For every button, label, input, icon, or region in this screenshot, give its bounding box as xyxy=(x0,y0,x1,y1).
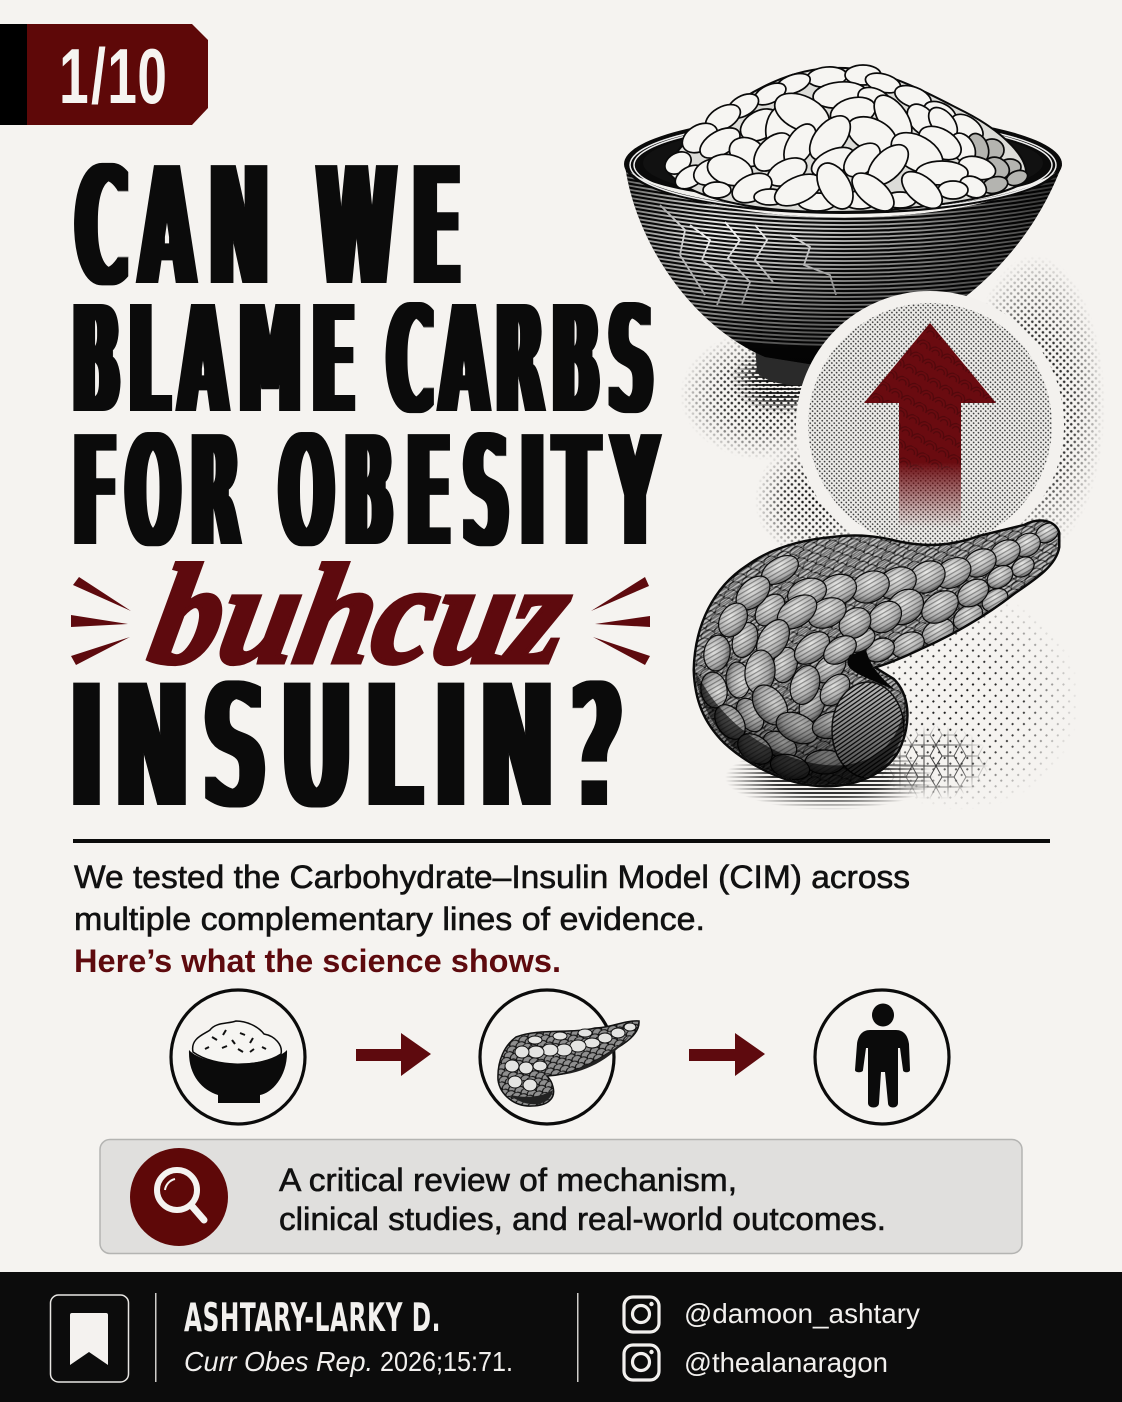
burst marks left xyxy=(71,577,131,665)
highlighted sentence: Here’s what the science shows. xyxy=(74,943,561,979)
callout text xyxy=(279,1162,886,1237)
icon: bookmark xyxy=(50,1295,128,1382)
circle xyxy=(796,291,1064,559)
social handle 2: @thealanaragon xyxy=(684,1347,888,1378)
script word: buhcuz xyxy=(140,536,583,694)
arrow 2 xyxy=(689,1033,765,1076)
callout text: clinical studies, and real-world outcomes. xyxy=(279,1201,886,1237)
intro text block: multiple complementary lines of evidence. xyxy=(74,901,705,937)
citation: ASHTARY-LARKY D. xyxy=(184,1296,441,1341)
intro text block xyxy=(74,859,910,979)
title accent: buhcuz with burst marks xyxy=(71,536,650,694)
divider rule xyxy=(73,839,1050,843)
bowl foot xyxy=(755,345,835,385)
bowl rim xyxy=(624,114,1062,214)
rice pile xyxy=(661,65,1030,218)
badge: slide counter 1/10: 1/10 xyxy=(59,34,167,121)
title: main headline: BLAME CARBS xyxy=(73,270,653,451)
citation xyxy=(184,1296,513,1377)
icon: pancreas in circle xyxy=(480,990,639,1124)
halftone shadows behind illustration xyxy=(680,255,1105,810)
icon: magnifying glass xyxy=(130,1148,228,1246)
intro text block: We tested the Carbohydrate–Insulin Model (CIM) across xyxy=(74,859,910,895)
illustration: pancreas xyxy=(690,515,1065,790)
badge: slide counter 1/10 xyxy=(0,24,208,125)
social handle 2 xyxy=(624,1345,888,1380)
upward arrow xyxy=(864,323,996,530)
icon: rice bowl in circle xyxy=(171,990,305,1124)
arrow 1 xyxy=(356,1033,431,1076)
citation: 2026;15:71. xyxy=(380,1346,513,1377)
burst marks right xyxy=(591,577,650,665)
title: main headline: CAN WE xyxy=(75,128,461,326)
bowl body xyxy=(626,165,1062,364)
panel: critical review callout xyxy=(100,1140,1022,1254)
title: main headline: INSULIN? xyxy=(70,645,623,850)
citation: Curr Obes Rep. xyxy=(184,1346,373,1377)
footer bar xyxy=(0,1272,1122,1402)
title: main headline: FOR OBESITY xyxy=(73,400,659,585)
illustration: bowl of rice xyxy=(624,64,1062,386)
flow diagram: rice to pancreas to person xyxy=(171,990,949,1124)
illustration: arrow in circle xyxy=(796,291,1064,559)
social handle 1: @damoon_ashtary xyxy=(684,1298,920,1329)
title: main headline xyxy=(70,128,659,850)
icon: person in circle xyxy=(815,990,949,1124)
callout text: A critical review of mechanism, xyxy=(279,1162,737,1198)
